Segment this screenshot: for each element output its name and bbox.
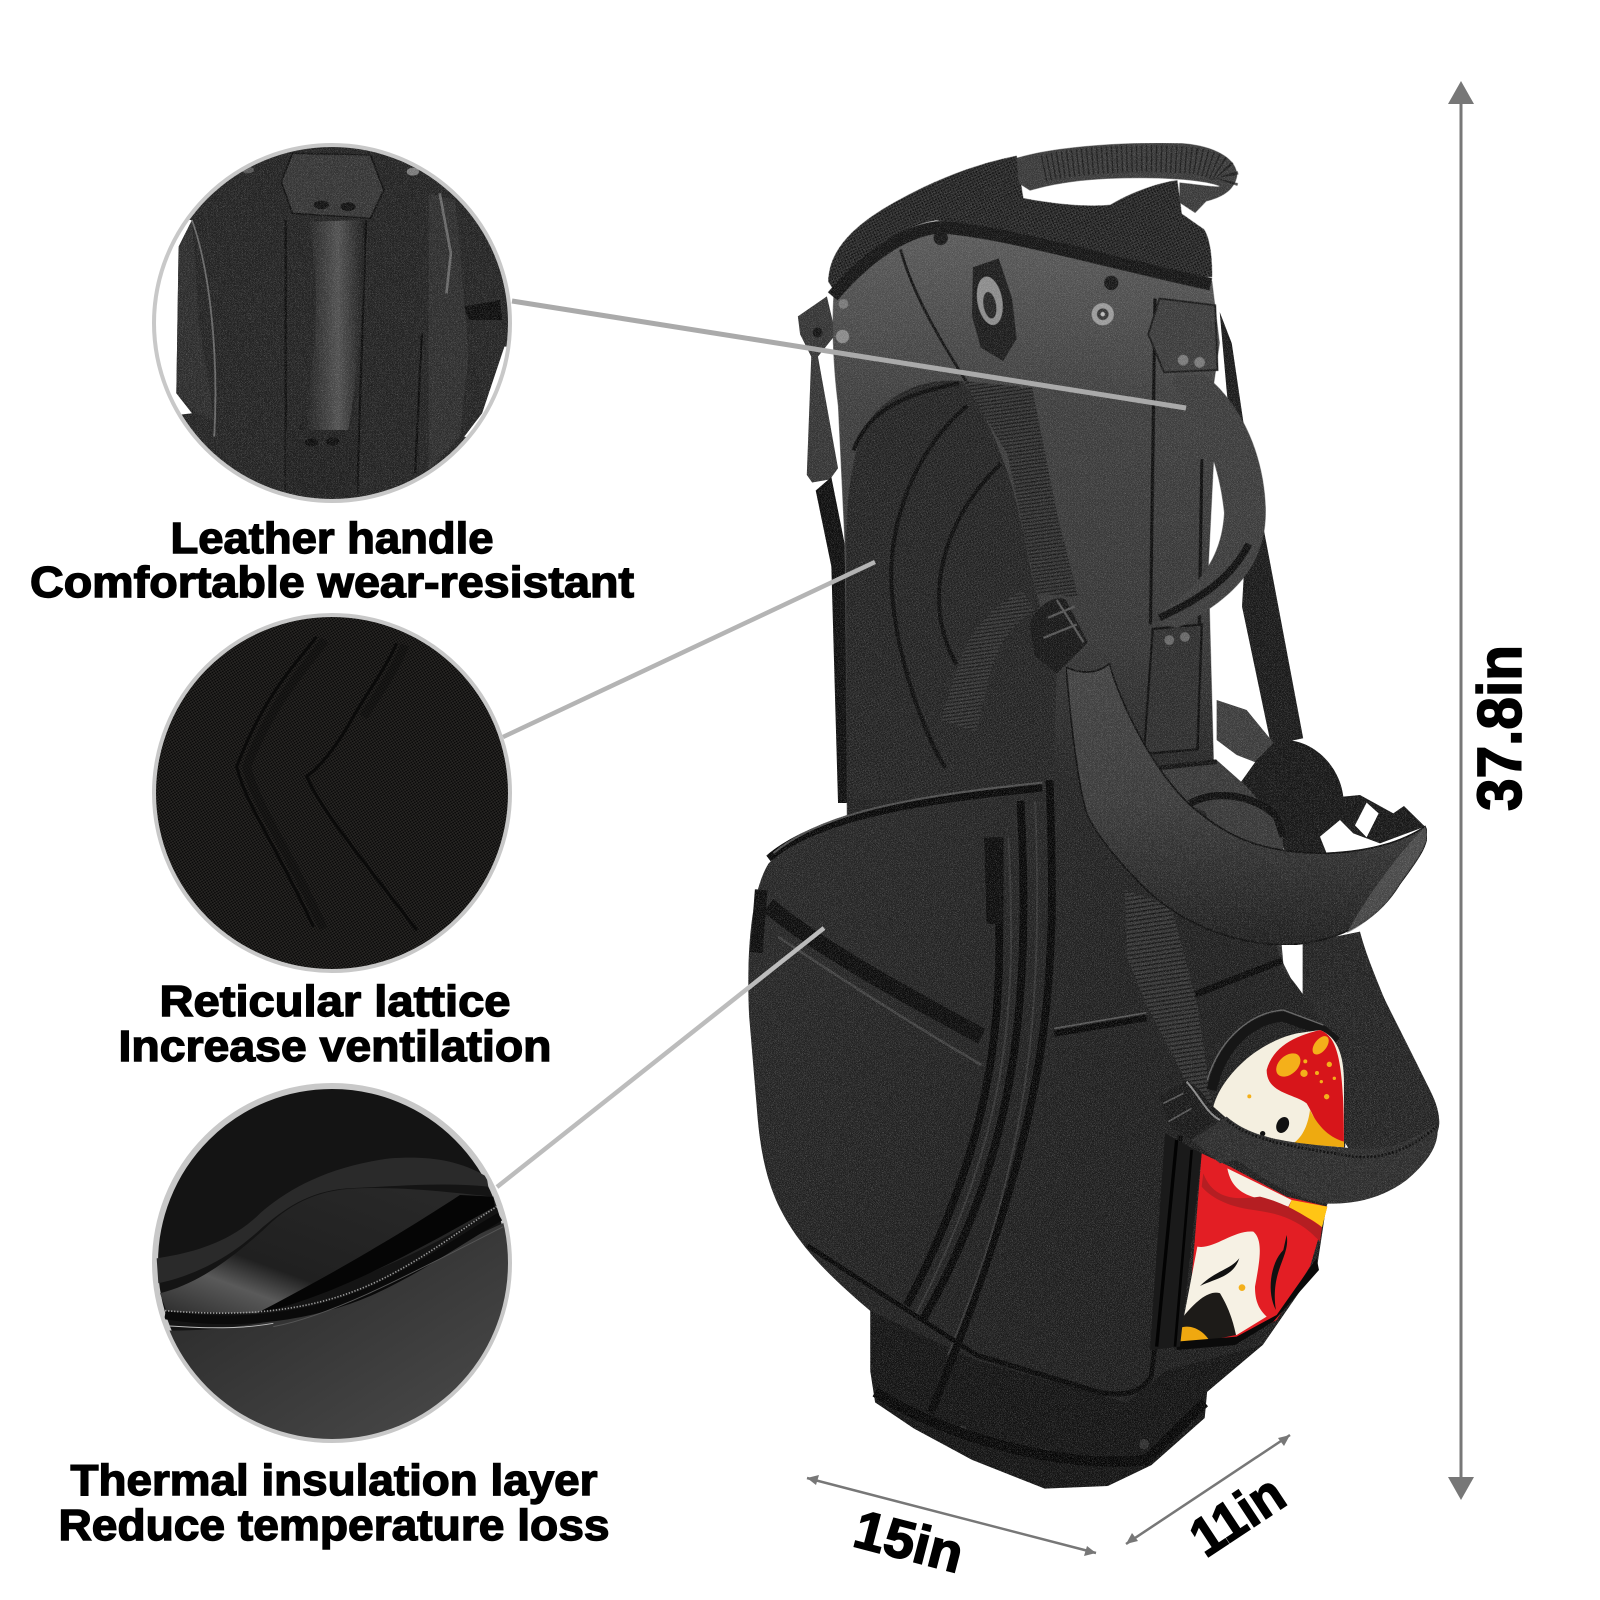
- metal hardware: [972, 258, 1017, 361]
- label: reticular lattice: Increase ventilation: [118, 1022, 552, 1071]
- rear harness pad and buckle: [1217, 700, 1425, 1040]
- detail circle: thermal insulation layer: [153, 1086, 510, 1447]
- label: thermal insulation layer: [58, 1456, 610, 1550]
- leader line: thermal insulation: [497, 928, 824, 1187]
- leather side handle: [1159, 374, 1266, 628]
- label: thermal insulation layer: Reduce temperature loss: [58, 1501, 610, 1550]
- webbing shoulder strap: [964, 381, 1078, 598]
- label: reticular lattice: [118, 977, 552, 1071]
- depth dimension arrow: [1126, 1435, 1290, 1544]
- padded mesh back panel: [846, 381, 1057, 799]
- label: thermal insulation layer: Thermal insulation layer: [70, 1456, 598, 1505]
- side zip channel: [1150, 1133, 1202, 1350]
- upper back padding below strap: [1303, 932, 1402, 1040]
- width dimension arrow: [807, 1475, 1096, 1556]
- shoulder strap full arc: [1066, 663, 1427, 945]
- lower handle tab: [1144, 624, 1202, 754]
- printed pattern panel: [1177, 1010, 1344, 1350]
- label: leather handle: Leather handle: [170, 514, 494, 563]
- top rubber handle: [1017, 143, 1237, 213]
- main pocket: [748, 780, 1345, 1402]
- leader line: reticular lattice: [503, 562, 875, 737]
- rear carry strap and stand: [798, 296, 1303, 803]
- diagonal pocket zipper: [768, 906, 982, 1036]
- leader line: leather handle: [512, 301, 1186, 408]
- base: [870, 1303, 1263, 1489]
- height label: 37.8in: [1466, 645, 1535, 811]
- vertical zippers: [907, 780, 1052, 1413]
- top mesh collar: [828, 156, 1212, 290]
- label: leather handle: Comfortable wear-resistant: [30, 558, 634, 607]
- upper bag body: [813, 143, 1266, 821]
- golf bag product illustration: [748, 143, 1439, 1489]
- shoulder strap lower arc and buckle: [1160, 1080, 1438, 1204]
- height dimension arrow: [1448, 81, 1474, 1500]
- detail circle: leather handle: [152, 143, 512, 503]
- strap loop and buckle: [941, 591, 1034, 732]
- width label: 15in: [848, 1499, 970, 1585]
- right pocket piping: [1054, 1018, 1147, 1034]
- lower bag body and pockets: [748, 780, 1345, 1489]
- side grab tab: [1148, 299, 1217, 372]
- lower back padding: [1307, 980, 1439, 1159]
- detail circle: reticular lattice: [150, 610, 513, 973]
- label: leather handle: [30, 514, 634, 607]
- label: reticular lattice: Reticular lattice: [160, 977, 510, 1026]
- webbing strap: [1125, 890, 1212, 1104]
- body bulge behind shoulder strap: [1100, 760, 1313, 1047]
- depth label: 11in: [1179, 1463, 1296, 1568]
